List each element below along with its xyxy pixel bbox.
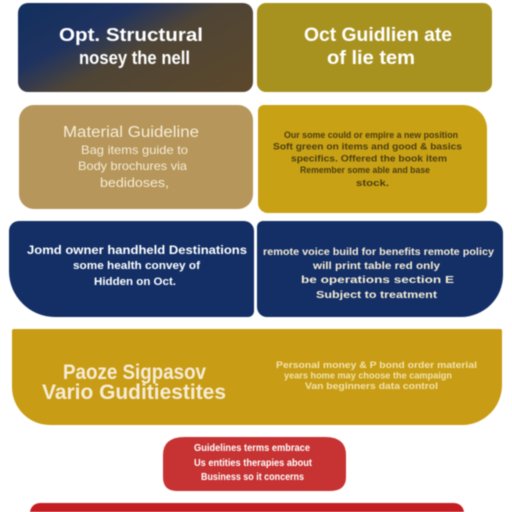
banner heading: Vario Guditiestites: [42, 381, 226, 404]
card text: be operations section E: [301, 275, 454, 286]
panel: top left heading: [18, 3, 253, 92]
callout text: Guidelines terms embrace: [194, 443, 310, 454]
callout text: Us entities therapies about: [194, 458, 313, 469]
panel: top right heading: [257, 3, 492, 92]
heading text: of lie tem: [327, 48, 415, 69]
banner heading: [42, 361, 226, 404]
callout text: Business so it concerns: [201, 472, 304, 483]
panel: red footer bar: [30, 503, 464, 512]
card text: [263, 247, 494, 301]
card text: Subject to treatment: [316, 290, 438, 301]
card title: Material Guideline: [63, 124, 199, 141]
panel: navy right card: [257, 221, 503, 317]
card text: Jomd owner handheld Destinations: [27, 243, 247, 257]
panel: navy left card: [9, 221, 254, 317]
card text: remote voice build for benefits remote policy: [263, 247, 494, 258]
banner body: [276, 360, 477, 391]
card body: Body brochures via: [78, 159, 187, 173]
banner body: years home may choose the campaign: [284, 370, 452, 380]
card body: Our some could or empire a new position: [284, 130, 458, 140]
card text: some health convey of: [73, 260, 200, 272]
card text: will print table red only: [312, 261, 441, 272]
callout text: [194, 443, 313, 483]
banner body: Personal money & P bond order material: [276, 360, 477, 370]
card text: [27, 243, 247, 288]
card text: Hidden on Oct.: [94, 276, 176, 288]
heading text: Oct Guidlien ate: [304, 25, 452, 46]
card body: stock.: [356, 178, 389, 188]
panel: red callout: [163, 437, 346, 491]
heading line one: Opt. Structural: [59, 25, 203, 45]
panel: gold text card: [258, 105, 487, 213]
heading line two: nosey the nell: [79, 48, 190, 68]
heading text: [304, 25, 452, 69]
card body: specifics. Offered the book item: [291, 154, 447, 164]
panel: tan guideline card: [19, 105, 253, 209]
banner heading: Paoze Sigpasov: [63, 361, 206, 384]
card body: bedidoses,: [100, 175, 169, 190]
card body: Soft green on items and good & basics: [273, 142, 462, 152]
card body: [273, 130, 462, 188]
card body: Bag items guide to: [81, 143, 188, 157]
card body: Remember some able and base: [300, 165, 430, 175]
card body: [78, 143, 188, 190]
banner body: Van beginners data control: [305, 381, 438, 391]
panel: wide gold banner: [12, 329, 502, 425]
